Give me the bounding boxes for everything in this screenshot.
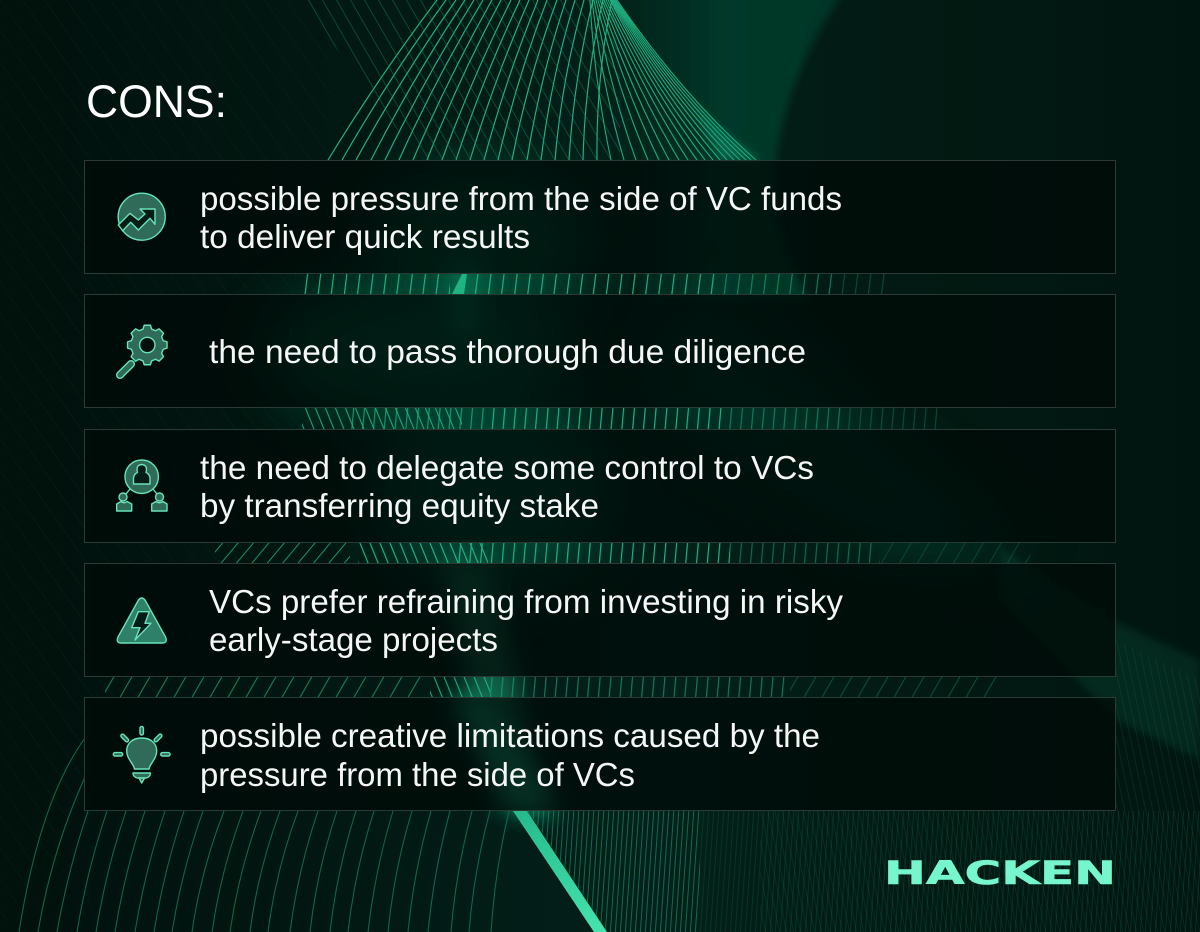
icon: delegated people <box>117 460 167 511</box>
top line wave <box>328 0 756 160</box>
text <box>209 584 843 659</box>
panel: risky projects <box>84 564 1116 676</box>
icon: light bulb <box>113 726 170 783</box>
text: pressure from the side of VCs <box>200 757 635 794</box>
text: VCs prefer refraining from investing in risky <box>209 584 843 621</box>
text: the need to delegate some control to VCs <box>200 450 814 487</box>
panel: due diligence <box>84 294 1116 408</box>
text <box>200 181 842 256</box>
icon: magnifier and gear <box>120 325 167 375</box>
panel background <box>84 698 1116 810</box>
title: CONS: <box>86 76 227 127</box>
text <box>200 450 814 525</box>
panel background <box>84 430 1116 542</box>
text: to deliver quick results <box>200 219 530 256</box>
text <box>200 718 820 794</box>
text: possible creative limitations caused by the <box>200 718 820 755</box>
icon: warning lightning <box>117 598 166 643</box>
panel background <box>84 564 1116 676</box>
text: possible pressure from the side of VC funds <box>200 181 842 218</box>
text: early-stage projects <box>209 622 498 659</box>
gap line strips <box>105 274 1030 697</box>
panel: delegate control <box>84 430 1116 542</box>
text: the need to pass thorough due diligence <box>209 334 806 371</box>
panel: creative limitations <box>84 698 1116 810</box>
panel background <box>84 160 1116 274</box>
icon: rising chart <box>118 193 165 240</box>
panel background <box>84 294 1116 408</box>
logo: HACKEN <box>884 854 1116 892</box>
bottom line wave <box>19 738 509 932</box>
panel: quick results pressure <box>84 160 1116 274</box>
text: by transferring equity stake <box>200 488 599 525</box>
